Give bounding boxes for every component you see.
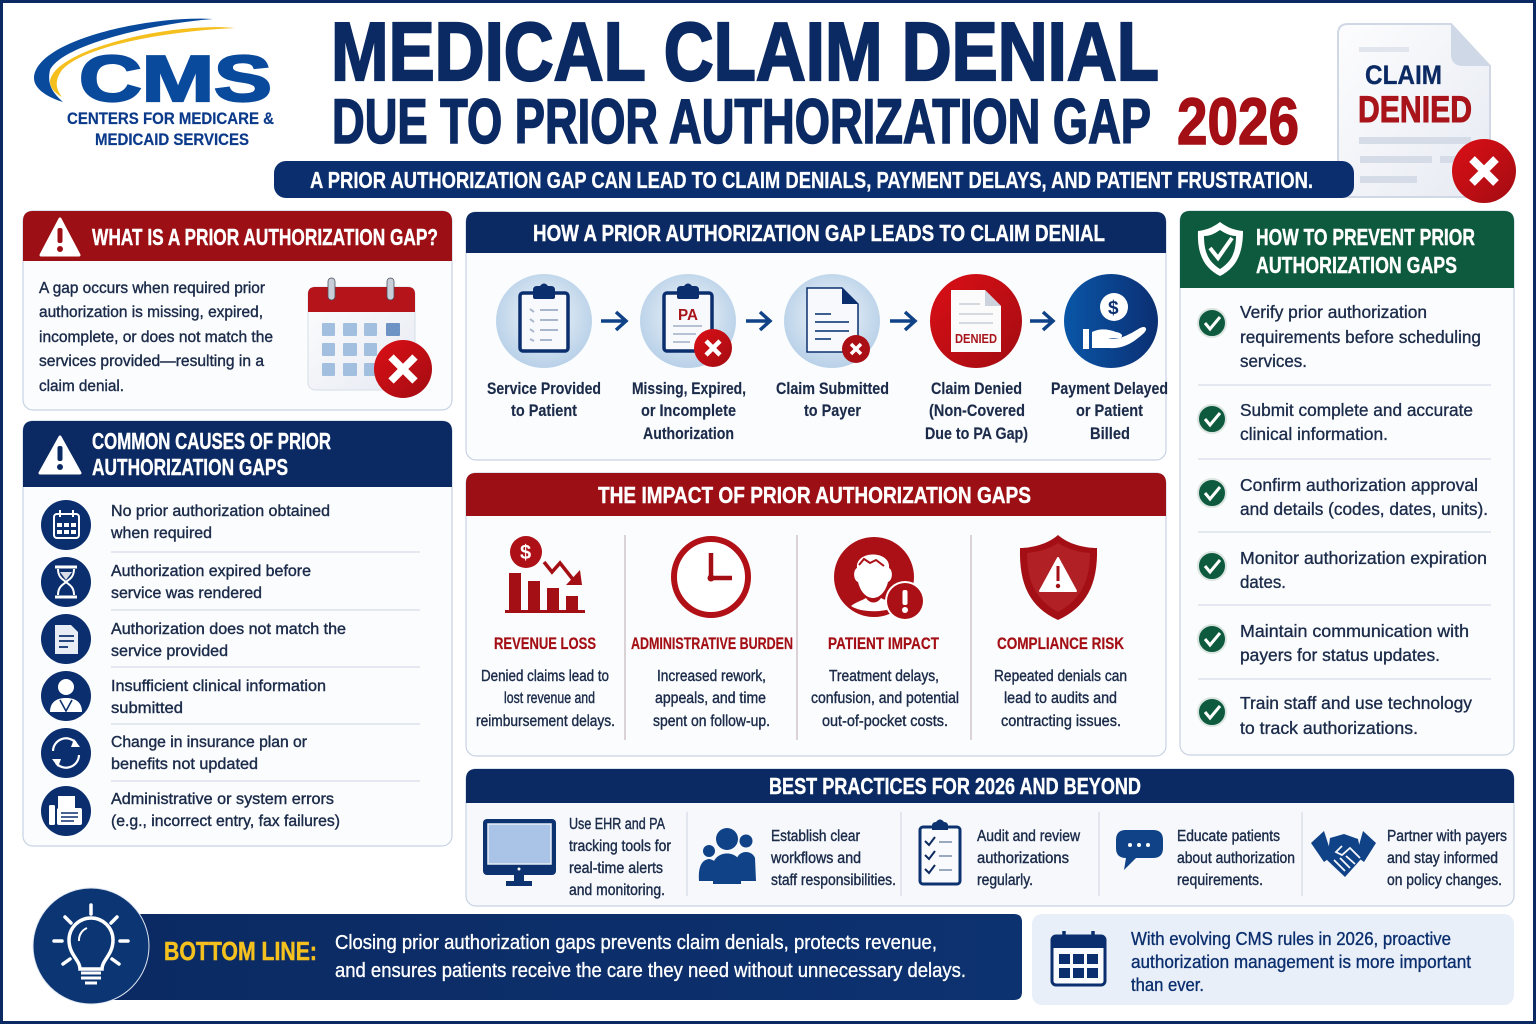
item: submit complete information: Submit complete and accurate (1240, 400, 1473, 420)
impact: revenue loss: lost revenue and (504, 690, 595, 707)
item: verify requirements (1198, 302, 1481, 371)
item: verify requirements: requirements before scheduling (1240, 327, 1481, 347)
arrow (1030, 312, 1053, 330)
impact: administrative burden: appeals, and time (655, 690, 766, 707)
practice: EHR tools: and monitoring. (569, 882, 665, 899)
title: MEDICAL CLAIM DENIAL (331, 5, 1159, 98)
title (331, 5, 1299, 158)
practice: partner with payers: and stay informed (1387, 850, 1498, 867)
step: claim denied: Claim Denied (931, 380, 1022, 398)
practice: clear workflows: Establish clear (771, 828, 860, 845)
impact: patient impact: out-of-pocket costs. (822, 713, 948, 730)
impact: revenue loss: REVENUE LOSS (494, 635, 596, 653)
impact: compliance risk: COMPLIANCE RISK (997, 635, 1124, 653)
practice: audit authorizations (920, 820, 1081, 889)
item: train staff: Train staff and use technology (1240, 693, 1472, 713)
heading: what is a gap: WHAT IS A PRIOR AUTHORIZATION GAP? (92, 224, 438, 250)
impact: administrative burden: spent on follow-up. (653, 713, 770, 730)
step: claim submitted: Claim Submitted (776, 380, 889, 398)
practice: clear workflows: workflows and (770, 850, 861, 867)
step: service provided (487, 274, 601, 420)
practice: clear workflows: staff responsibilities. (771, 872, 896, 889)
step: missing, expired, incomplete: PA (678, 307, 698, 324)
heading: impact (466, 473, 1166, 516)
icon: calendar (1052, 931, 1105, 985)
cause: authorization expired: Authorization expired before (111, 563, 311, 580)
item: maintain communication: payers for status updates. (1240, 645, 1440, 665)
item: maintain communication: Maintain communication with (1240, 621, 1469, 641)
step: claim denied (925, 274, 1028, 443)
impact: compliance risk: contracting issues. (1001, 713, 1121, 730)
cause: change in insurance plan: benefits not updated (111, 756, 258, 773)
panel: best practices (466, 769, 1514, 906)
step: service provided: to Patient (511, 402, 577, 420)
panel: common causes (23, 421, 452, 846)
cause: does not match (41, 614, 346, 664)
step: missing, expired, incomplete: Missing, Expired, (632, 380, 746, 398)
text: gap definition (39, 280, 273, 395)
step: claim denied: DENIED (955, 331, 997, 346)
step: payment delayed (1051, 274, 1168, 443)
callout: evolving CMS rules: With evolving CMS rules in 2026, proactive (1131, 929, 1451, 949)
icon: claim denied document: DENIED (1358, 89, 1472, 130)
step: claim denied: Due to PA Gap) (925, 425, 1028, 443)
practice: clear workflows (699, 828, 896, 889)
step: payment delayed: $ (1108, 298, 1119, 319)
heading: common causes: COMMON CAUSES OF PRIOR (92, 428, 331, 454)
impact: compliance risk: lead to audits and (1004, 690, 1117, 707)
callout: bottom line: BOTTOM LINE: (164, 936, 317, 966)
title: 2026 (1177, 84, 1299, 158)
step: claim submitted (776, 274, 889, 420)
heading: how to prevent: AUTHORIZATION GAPS (1256, 252, 1457, 278)
practice: audit authorizations: authorizations (977, 850, 1069, 867)
heading: impact: THE IMPACT OF PRIOR AUTHORIZATION GAPS (598, 482, 1031, 508)
item: verify requirements: services. (1240, 351, 1307, 371)
step: payment delayed: Payment Delayed (1051, 380, 1168, 398)
text: gap definition: authorization is missing, expired, (39, 304, 263, 321)
panel: how to prevent (1180, 211, 1514, 755)
logo: CMS (34, 19, 274, 149)
item: maintain communication (1198, 621, 1469, 665)
icon: lightbulb (33, 888, 149, 1004)
impact: patient impact (811, 537, 959, 730)
icon: red X badge (1452, 139, 1516, 203)
step: missing, expired, incomplete: Authorization (643, 425, 734, 443)
cause: authorization expired (41, 557, 311, 607)
practice: audit authorizations: Audit and review (977, 828, 1081, 845)
logo: CMS: MEDICAID SERVICES (95, 131, 249, 149)
icon: claim denied document: CLAIM (1365, 60, 1442, 90)
panel: impact (466, 473, 1166, 756)
cause: change in insurance plan (41, 728, 308, 778)
heading: how a gap leads to denial (466, 212, 1166, 253)
title: DUE TO PRIOR AUTHORIZATION GAP (332, 87, 1151, 157)
impact: administrative burden: Increased rework, (657, 668, 766, 685)
callout: evolving CMS rules: authorization management is more important (1131, 952, 1471, 972)
heading: what is a gap (23, 211, 452, 261)
callout: evolving CMS rules: than ever. (1131, 975, 1204, 995)
cause: administrative errors: (e.g., incorrect entry, fax failures) (111, 813, 340, 830)
arrow (890, 312, 915, 330)
practice: educate patients: requirements. (1177, 872, 1263, 889)
arrow (601, 312, 626, 330)
cause: change in insurance plan: Change in insurance plan or (111, 734, 308, 751)
step: service provided: Service Provided (487, 380, 601, 398)
cause: insufficient clinical information (41, 671, 326, 721)
text: gap definition: A gap occurs when required prior (39, 280, 266, 297)
cause: authorization expired: service was rendered (111, 585, 262, 602)
arrow (746, 312, 770, 330)
item: monitor expiration: Monitor authorization expiration (1240, 548, 1487, 568)
cause: no prior authorization: when required (110, 525, 212, 542)
cause: does not match: Authorization does not match the (111, 621, 346, 638)
item: confirm approval: Confirm authorization approval (1240, 475, 1478, 495)
cause: administrative errors (41, 786, 340, 836)
logo: CMS: CENTERS FOR MEDICARE & (67, 110, 274, 128)
callout: bottom line: and ensures patients receive the care they need without unnecessary delays. (335, 960, 966, 982)
heading: common causes (23, 421, 452, 487)
cause: insufficient clinical information: submitted (111, 700, 183, 717)
heading: common causes: AUTHORIZATION GAPS (92, 454, 288, 480)
impact: patient impact: PATIENT IMPACT (828, 635, 939, 653)
practice: EHR tools: real-time alerts (569, 860, 663, 877)
item: train staff: to track authorizations. (1240, 718, 1418, 738)
impact: revenue loss (476, 536, 615, 730)
item: monitor expiration: dates. (1240, 572, 1286, 592)
cause: no prior authorization: No prior authorization obtained (111, 503, 330, 520)
cause: no prior authorization (41, 500, 330, 550)
heading: how to prevent (1180, 211, 1514, 288)
practice: educate patients (1116, 828, 1295, 889)
panel: what is a prior authorization gap (23, 211, 452, 410)
practice: partner with payers (1311, 828, 1507, 889)
practice: audit authorizations: regularly. (977, 872, 1033, 889)
item: verify requirements: Verify prior authorization (1240, 302, 1427, 322)
step: claim denied: (Non-Covered (929, 402, 1025, 420)
step: missing, expired, incomplete (632, 274, 746, 443)
heading: how a gap leads to denial: HOW A PRIOR AUTHORIZATION GAP LEADS TO CLAIM DENIAL (533, 220, 1105, 246)
practice: partner with payers: on policy changes. (1387, 872, 1502, 889)
icon: claim denied document (1338, 24, 1490, 197)
heading: best practices: BEST PRACTICES FOR 2026 AND BEYOND (769, 773, 1141, 799)
panel: how a gap leads to denial (466, 212, 1168, 460)
icon: calendar with X (308, 278, 432, 398)
callout: bottom line (33, 888, 1022, 1004)
practice: partner with payers: Partner with payers (1387, 828, 1507, 845)
item: confirm approval: and details (codes, dates, units). (1240, 499, 1488, 519)
cause: insufficient clinical information: Insufficient clinical information (111, 678, 326, 695)
item: confirm approval (1198, 475, 1488, 519)
heading: best practices (466, 769, 1514, 803)
impact: administrative burden (631, 539, 793, 730)
subtitle banner (274, 161, 1354, 198)
cause: does not match: service provided (111, 643, 228, 660)
item: submit complete information (1198, 400, 1473, 444)
text: gap definition: claim denial. (39, 378, 124, 395)
callout: evolving CMS rules (1032, 914, 1514, 1005)
subtitle banner: A PRIOR AUTHORIZATION GAP CAN LEAD TO CLAIM DENIALS, PAYMENT DELAYS, AND PATIENT FRUSTRATION. (310, 167, 1313, 193)
impact: administrative burden: ADMINISTRATIVE BURDEN (631, 635, 793, 653)
step: payment delayed: Billed (1090, 425, 1130, 443)
practice: EHR tools: Use EHR and PA (569, 816, 666, 833)
cause: administrative errors: Administrative or system errors (111, 791, 334, 808)
impact: patient impact: Treatment delays, (829, 668, 939, 685)
practice: educate patients: Educate patients (1177, 828, 1280, 845)
impact: revenue loss: $ (520, 542, 531, 564)
text: gap definition: services provided—resulting in a (39, 353, 264, 370)
step: missing, expired, incomplete: or Incomplete (641, 402, 736, 420)
practice: EHR tools: tracking tools for (569, 838, 671, 855)
text: gap definition: incomplete, or does not match the (39, 329, 273, 346)
impact: compliance risk (994, 535, 1127, 730)
heading: how to prevent: HOW TO PREVENT PRIOR (1256, 224, 1475, 250)
step: claim submitted: to Payer (804, 402, 861, 420)
practice: educate patients: about authorization (1177, 850, 1295, 867)
item: monitor expiration (1198, 548, 1487, 592)
callout: bottom line: Closing prior authorization gaps prevents claim denials, protects revenue, (335, 932, 937, 954)
practice: EHR tools (483, 816, 671, 899)
item: submit complete information: clinical information. (1240, 424, 1388, 444)
step: payment delayed: or Patient (1076, 402, 1143, 420)
logo: CMS: CMS (79, 42, 272, 115)
impact: patient impact: confusion, and potential (811, 690, 959, 707)
impact: revenue loss: reimbursement delays. (476, 713, 615, 730)
item: train staff (1198, 693, 1472, 738)
impact: compliance risk: Repeated denials can (994, 668, 1127, 685)
impact: revenue loss: Denied claims lead to (481, 668, 609, 685)
